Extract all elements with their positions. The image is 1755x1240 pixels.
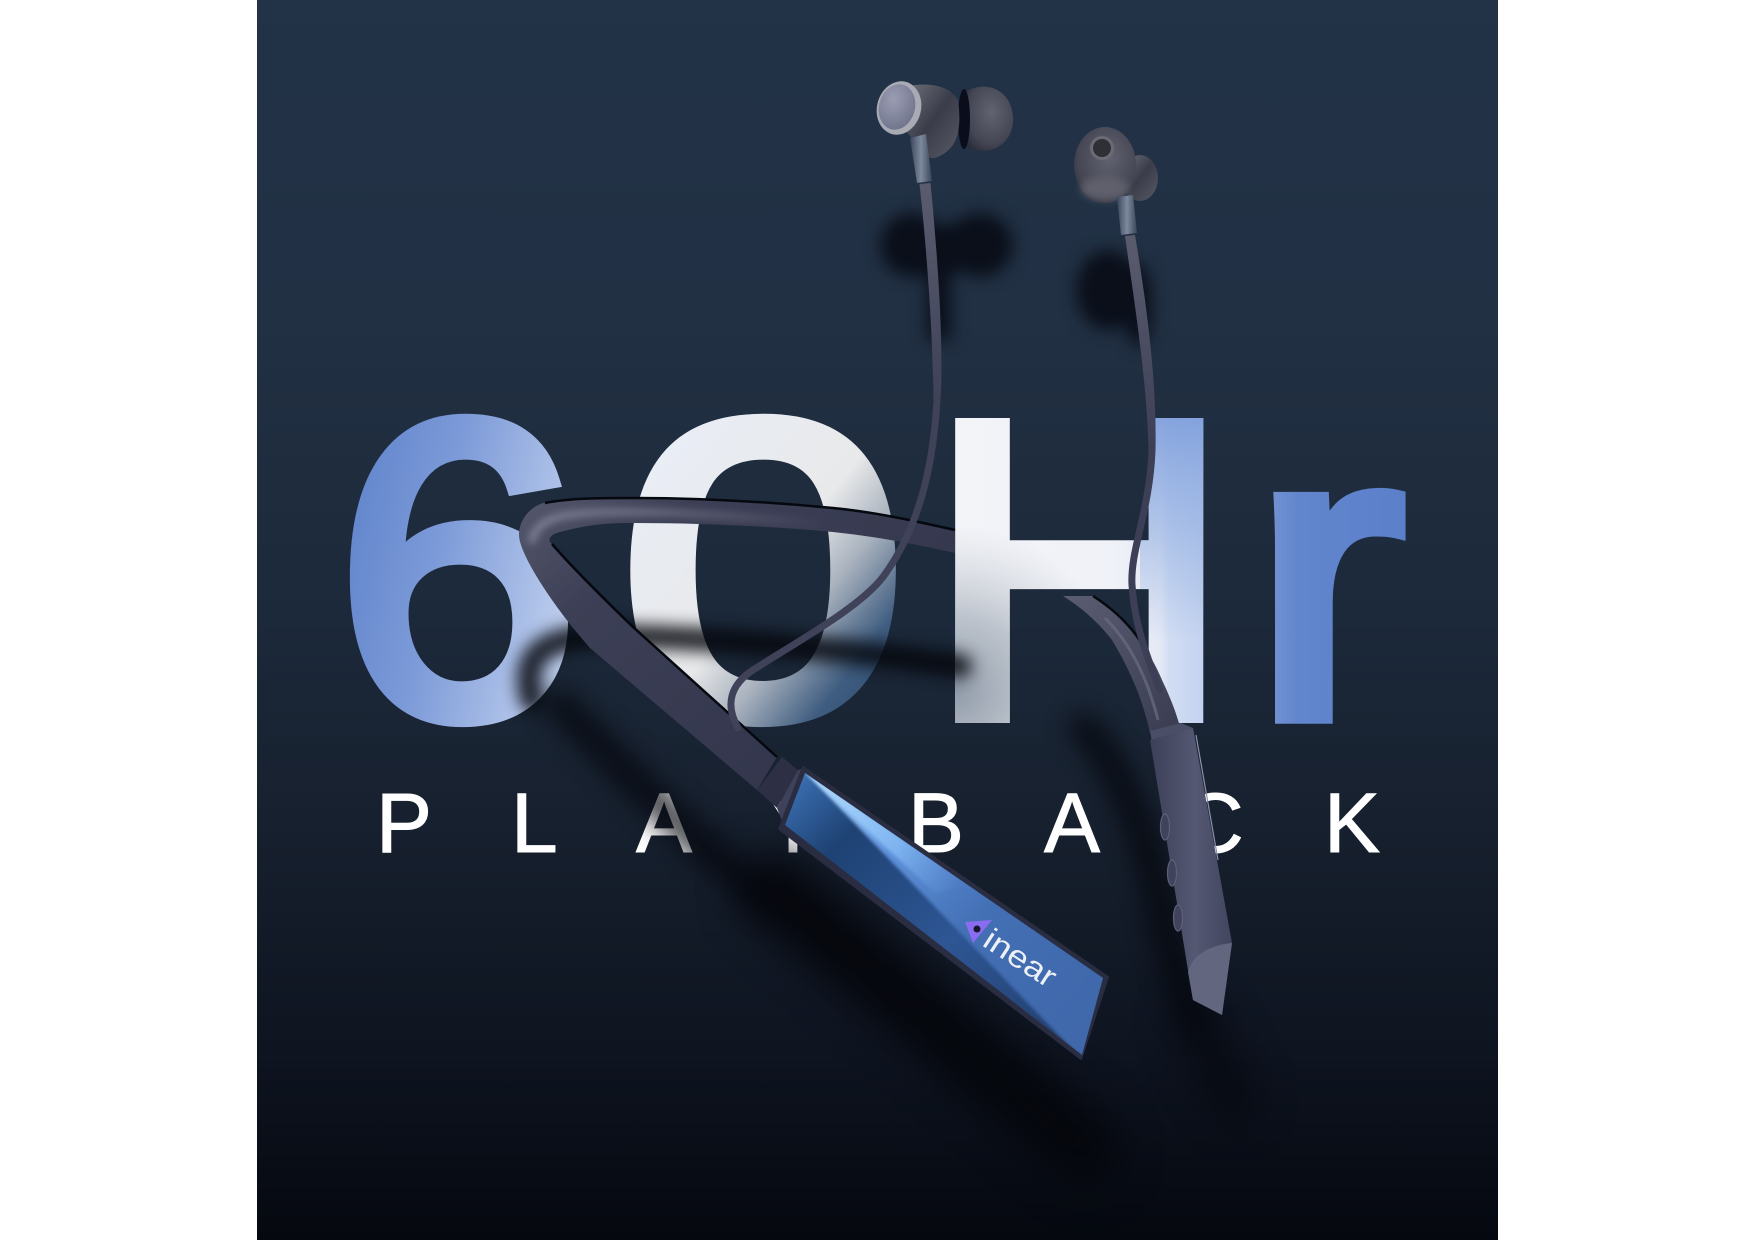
letter H: H	[929, 335, 1229, 804]
background panel	[257, 0, 1498, 1240]
right control module	[1150, 723, 1232, 1015]
brand logo	[965, 920, 1063, 994]
cast shadows	[529, 213, 1235, 1150]
gasket	[958, 89, 970, 149]
letter H	[955, 418, 1204, 723]
shadow: left module	[775, 890, 1085, 1150]
earbud: left	[871, 76, 1013, 183]
neckband	[519, 498, 1180, 790]
headline: 60Hr	[350, 414, 1406, 728]
eartip	[965, 87, 1013, 151]
digit 6: 6	[336, 335, 579, 804]
collar	[1150, 723, 1193, 742]
digit 0: 0	[620, 335, 906, 804]
neckband dark edge	[545, 498, 955, 530]
control buttons	[1160, 814, 1182, 931]
shadow: neckband left leg	[560, 705, 770, 900]
earphone wire: left	[731, 183, 941, 728]
neckband: right side	[1063, 596, 1180, 733]
infographic canvas	[257, 0, 1498, 1240]
earbud: right	[1074, 127, 1158, 235]
shadow: left earbud	[880, 213, 1013, 340]
letter r: r	[1252, 346, 1404, 804]
edge highlight	[1196, 735, 1218, 860]
shadow: neckband rear	[529, 636, 960, 700]
eartip	[1074, 127, 1136, 203]
shadow: right earbud	[1076, 250, 1152, 347]
blue glass face	[785, 773, 1103, 1055]
end cap	[1188, 943, 1232, 1015]
left control module	[757, 757, 1108, 1062]
light facet	[803, 770, 1108, 1062]
module body	[1150, 728, 1232, 1015]
neckband: rear and left leg	[519, 498, 955, 790]
collar	[757, 757, 798, 808]
stem	[910, 134, 932, 183]
shadow: right neckband	[1083, 727, 1195, 1020]
body	[905, 85, 959, 158]
back lobe	[1122, 155, 1158, 201]
subheading: PLAYBACK: PLAYBACK	[376, 776, 1380, 870]
logo triangle	[965, 920, 992, 943]
neckband highlight	[532, 512, 830, 543]
logo wordmark: inear	[977, 922, 1063, 994]
metal cap	[871, 76, 927, 140]
module body	[779, 767, 1108, 1059]
stem	[1117, 195, 1137, 235]
nozzle	[1090, 136, 1114, 160]
earphone wire: right	[1125, 235, 1160, 690]
